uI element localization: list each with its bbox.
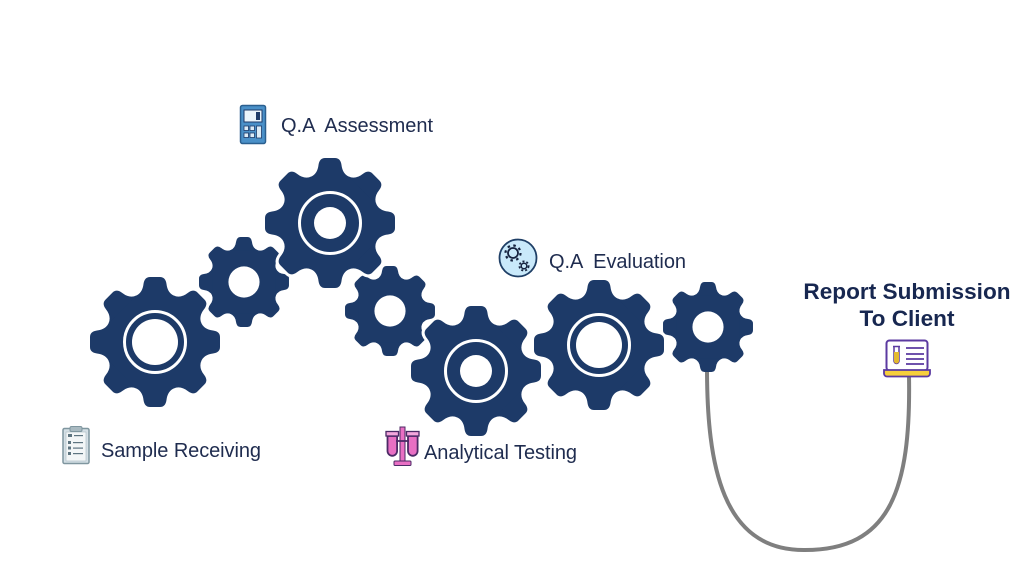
label: Sample Receiving: Sample Receiving (101, 440, 261, 462)
connector curve (707, 368, 909, 550)
gear: large 3 (411, 306, 541, 436)
label: Q.A Assessment: Q.A Assessment (281, 115, 433, 137)
label: Analytical Testing: Analytical Testing (424, 442, 577, 464)
icon: petri dish gears (500, 240, 536, 276)
gear: large 1 (90, 277, 220, 407)
gear: large 2 (265, 158, 395, 288)
icon: test tubes (386, 427, 419, 466)
gear: small 1 (199, 237, 289, 327)
heading: Report Submission To Client: Report Submission (803, 279, 1011, 304)
gear: small 2 (345, 266, 435, 356)
heading: Report Submission To Client: To Client (860, 306, 955, 331)
icon: clipboard (63, 426, 89, 464)
label: Q.A Evaluation: Q.A Evaluation (549, 251, 686, 273)
icon: calculator (240, 106, 266, 144)
heading: Report Submission To Client (803, 279, 1011, 331)
icon: laptop report (884, 340, 930, 376)
gear: small 3 (663, 282, 753, 372)
gear: large 4 (534, 280, 664, 410)
